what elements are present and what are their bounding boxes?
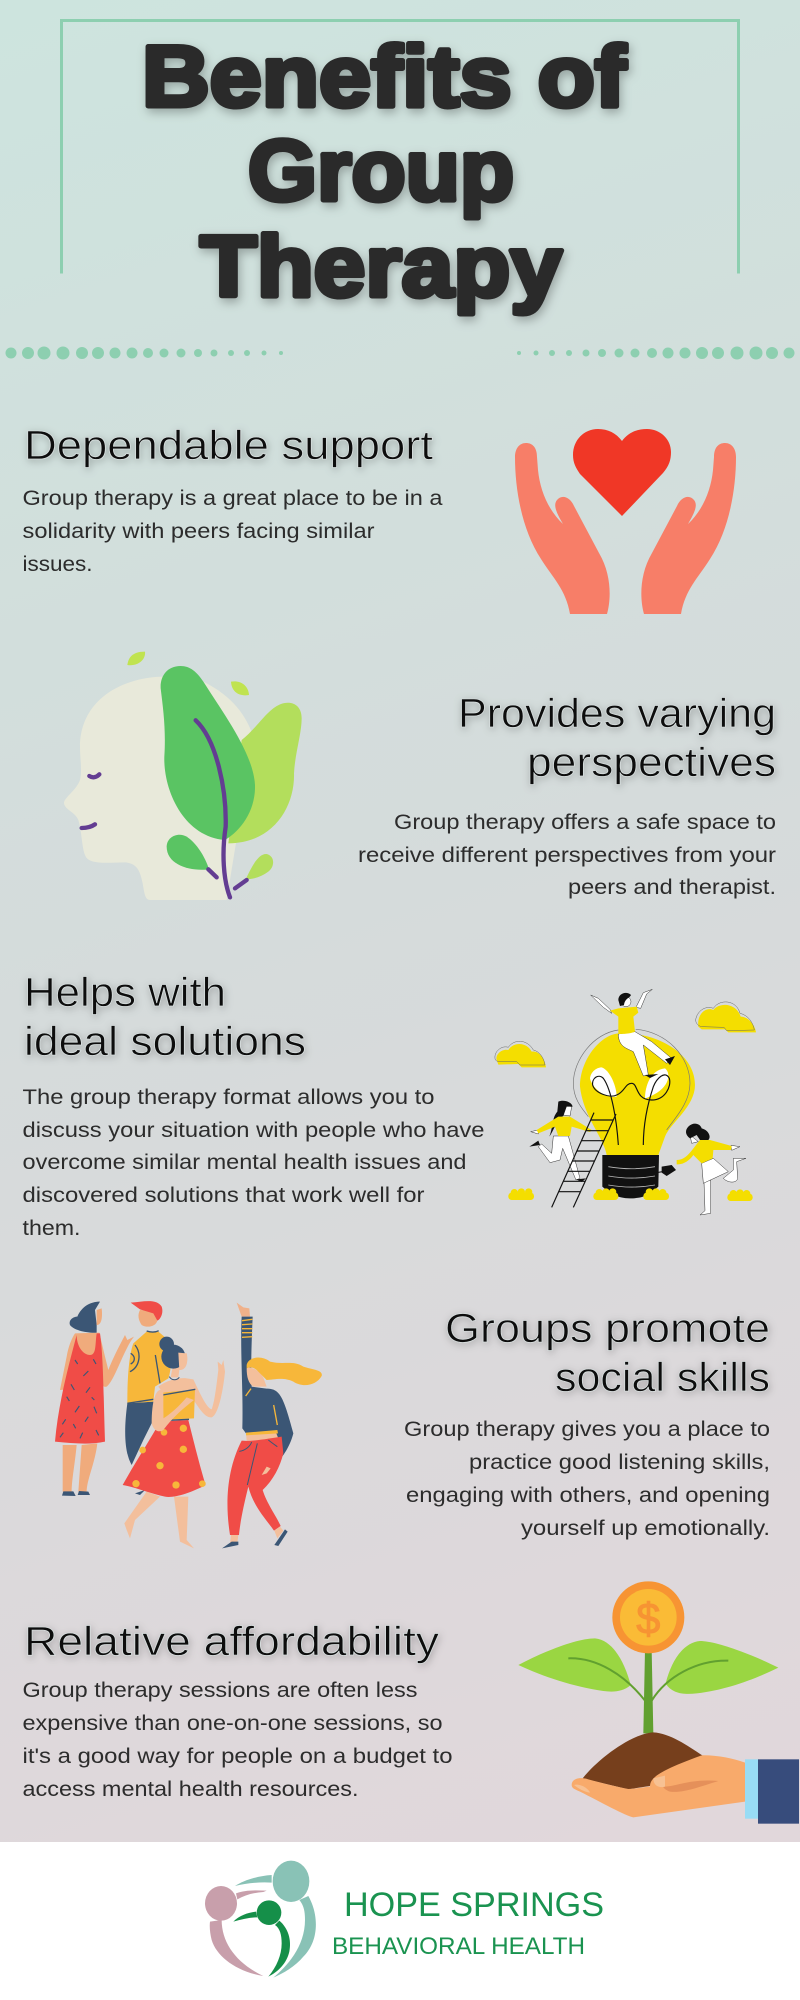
body text: Group therapy offers a safe space to: [394, 810, 776, 834]
title: Therapy: [200, 219, 562, 315]
heading: social skills: [555, 1354, 770, 1400]
icon: group of people: [55, 1301, 322, 1548]
title: Benefits of: [142, 29, 626, 125]
heading: Dependable support: [24, 422, 434, 468]
body text: [22, 1085, 484, 1240]
logo text: BEHAVIORAL HEALTH: [332, 1933, 585, 1960]
body text: discovered solutions that work well for: [22, 1183, 424, 1207]
panel: dependable support: [22, 422, 736, 614]
body text: practice good listening skills,: [469, 1450, 770, 1474]
panel: relative affordability: [22, 1581, 799, 1824]
heading: [458, 690, 776, 785]
body text: The group therapy format allows you to: [22, 1085, 435, 1109]
panel: varying perspectives: [64, 652, 776, 900]
title: [142, 29, 626, 315]
body text: overcome similar mental health issues and: [22, 1150, 467, 1174]
icon: hands holding heart: [515, 429, 736, 614]
title: Group: [248, 123, 514, 219]
panel: ideal solutions: [22, 969, 756, 1240]
heading: [24, 969, 306, 1064]
heading: ideal solutions: [24, 1018, 306, 1064]
logo text: HOPE SPRINGS: [344, 1886, 604, 1924]
heading: Relative affordability: [24, 1618, 440, 1664]
body text: receive different perspectives from your: [358, 843, 776, 867]
body text: them.: [22, 1216, 80, 1240]
dotted divider: [6, 346, 794, 360]
body text: Group therapy gives you a place to: [404, 1417, 770, 1441]
body text: it's a good way for people on a budget to: [22, 1744, 453, 1768]
body text: Group therapy is a great place to be in a: [22, 486, 443, 510]
body text: Group therapy sessions are often less: [22, 1678, 418, 1702]
title frame: [62, 20, 738, 274]
body text: [404, 1417, 770, 1540]
icon: logo figures: [205, 1861, 316, 1978]
body text: yourself up emotionally.: [521, 1516, 770, 1540]
body text: solidarity with peers facing similar: [22, 519, 374, 543]
body text: engaging with others, and opening: [406, 1483, 770, 1507]
heading: Provides varying: [458, 690, 776, 736]
heading: [445, 1305, 770, 1400]
body text: access mental health resources.: [22, 1777, 358, 1801]
body text: [22, 1678, 453, 1801]
body text: discuss your situation with people who have: [22, 1118, 484, 1142]
logo: Hope Springs Behavioral Health: [205, 1861, 604, 1978]
body text: issues.: [22, 552, 92, 576]
logo text: [332, 1886, 604, 1960]
body text: [22, 486, 443, 576]
heading: Groups promote: [445, 1305, 770, 1351]
icon: hand holding money plant: [518, 1581, 799, 1824]
icon: hand holding money plant: $: [636, 1595, 660, 1643]
body text: [358, 810, 776, 899]
body text: expensive than one-on-one sessions, so: [22, 1711, 443, 1735]
icon: head with leaves: [64, 652, 302, 900]
icon: light bulb with people: [495, 989, 756, 1215]
body text: peers and therapist.: [568, 875, 776, 899]
heading: perspectives: [527, 739, 776, 785]
panel: social skills: [55, 1301, 770, 1548]
heading: Helps with: [24, 969, 226, 1015]
